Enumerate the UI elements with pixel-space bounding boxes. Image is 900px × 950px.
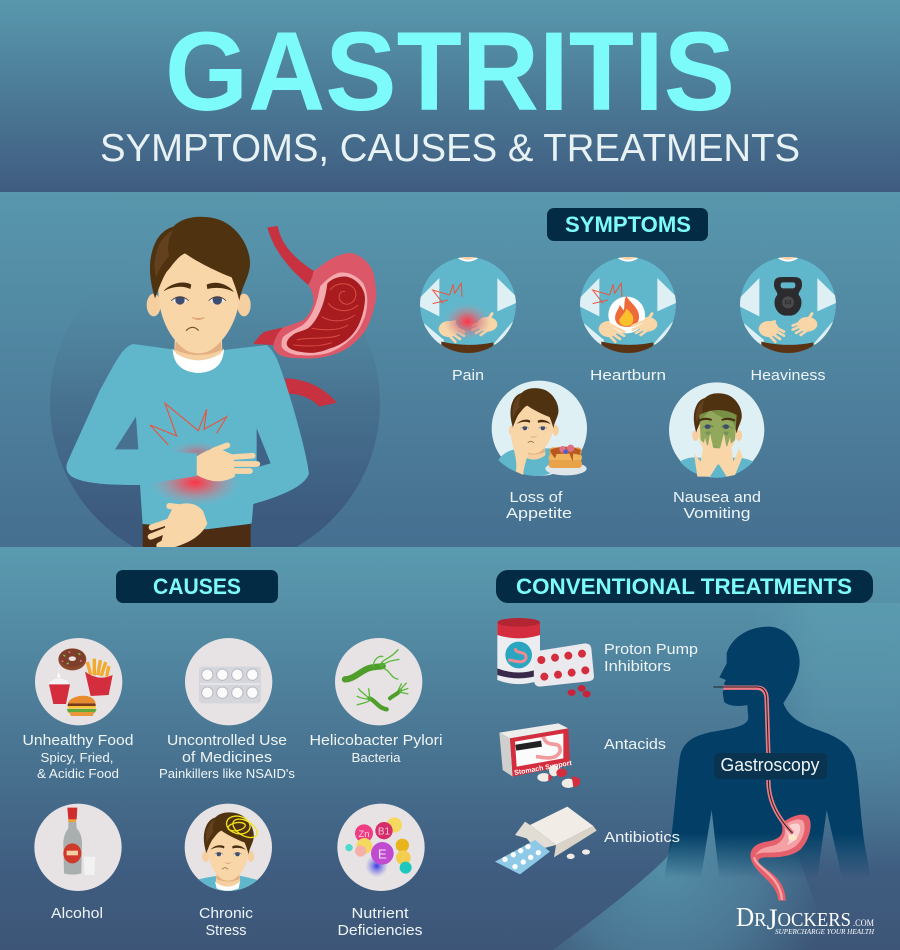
symptom: pain: Pain [452, 367, 484, 384]
cause: unhealthy food: Unhealthy Food [22, 732, 134, 749]
light wedge at bottom [553, 800, 830, 950]
symptom: nausea and vomiting: Nausea and [673, 489, 761, 506]
plate of pancakes [545, 445, 587, 475]
cause: unhealthy food [22, 638, 134, 781]
logo: DrJockers.com: J [767, 903, 778, 936]
symptom: pain [420, 257, 516, 384]
head [147, 217, 251, 366]
cause: helicobacter pylori [310, 638, 442, 765]
treatment: antibiotics [495, 807, 680, 874]
cause: chronic stress: Chronic [199, 905, 254, 922]
panel: symptoms icons [420, 257, 836, 522]
title: GASTRITIS [165, 9, 735, 134]
symptom: loss of appetite: Appetite [506, 505, 572, 522]
panel: causes [22, 638, 442, 939]
cause: nutrient deficiencies: Zn [359, 829, 369, 839]
cause: nutrient deficiencies: B1 [378, 827, 391, 838]
symptom: heaviness: 64 [785, 300, 792, 306]
symptom: heaviness [740, 257, 836, 384]
treatment: antacids [499, 723, 666, 788]
cause: nutrient deficiencies: Deficiencies [338, 922, 422, 939]
cause: chronic stress [185, 804, 272, 939]
cause: alcohol [34, 804, 122, 922]
treatment: proton pump inhibitors [497, 618, 698, 697]
subtitle: SYMPTOMS, CAUSES & TREATMENTS [100, 127, 800, 170]
icon: inflamed stomach [253, 226, 376, 407]
logo: DrJockers.com: OCKERS [777, 909, 851, 931]
lower hand [151, 503, 207, 547]
pain glow [154, 467, 236, 504]
treatment: proton pump inhibitors: Proton Pump [604, 641, 698, 658]
arm gaps [115, 417, 138, 449]
upper hand [140, 445, 257, 485]
cause: uncontrolled use of medicines: Painkillers like NSAID's [159, 767, 295, 781]
treatment: proton pump inhibitors: Inhibitors [604, 658, 671, 675]
symptom: heartburn [580, 257, 676, 384]
treatment: antacids: Stomach Support [514, 760, 573, 777]
panel: treatments list [495, 618, 698, 874]
cause: unhealthy food: Spicy, Fried, [40, 751, 114, 765]
trousers [143, 524, 251, 547]
collar [173, 349, 224, 373]
symptom: heaviness: Heaviness [750, 367, 826, 384]
heading: symptoms: SYMPTOMS [565, 212, 691, 237]
heading: causes: CAUSES [153, 574, 241, 599]
cause: uncontrolled use of medicines: of Medicines [182, 749, 272, 766]
pain spark [150, 403, 227, 445]
heading: causes [116, 570, 278, 603]
backdrop circle [50, 369, 380, 547]
illustration: man with stomach pain [50, 217, 380, 568]
logo: DrJockers.com [736, 902, 875, 936]
gastroscopy label: Gastroscopy [720, 755, 820, 775]
cause: nutrient deficiencies: E [378, 847, 387, 862]
panel: causes and treatments background [0, 547, 900, 950]
symptom: heartburn: Heartburn [590, 367, 666, 384]
cause: helicobacter pylori: Helicobacter Pylori [310, 732, 442, 749]
treatment: antacids: Antacids [604, 736, 666, 753]
symptom: loss of appetite: Loss of [510, 489, 563, 506]
body silhouette [663, 627, 872, 901]
heading: symptoms [547, 208, 708, 241]
heading: conventional treatments: CONVENTIONAL TREATMENTS [516, 574, 852, 599]
cause: chronic stress: Stress [206, 922, 246, 939]
gastroscopy label [714, 753, 827, 779]
symptom: nausea and vomiting [669, 382, 764, 522]
cause: nutrient deficiencies: Nutrient [352, 905, 409, 922]
logo: DrJockers.com: SUPERCHARGE YOUR HEALTH [775, 927, 875, 936]
cause: helicobacter pylori: Bacteria [352, 751, 401, 765]
cause: nutrient deficiencies [337, 804, 425, 939]
panel: symptoms background [0, 192, 900, 547]
silhouette with gastroscopy [663, 627, 872, 901]
logo: DrJockers.com: DR [736, 902, 768, 932]
treatment: antibiotics: Antibiotics [604, 829, 680, 846]
cause: unhealthy food: & Acidic Food [37, 767, 119, 781]
esophagus and stomach [713, 687, 811, 901]
cause: uncontrolled use of medicines [159, 638, 295, 781]
cause: uncontrolled use of medicines: Uncontrolled Use [167, 732, 287, 749]
symptom: loss of appetite [492, 381, 587, 522]
light area behind silhouette [787, 603, 900, 832]
heading: conventional treatments [496, 570, 873, 603]
logo: DrJockers.com: .COM [853, 918, 874, 928]
sweater [66, 344, 309, 529]
symptom: nausea and vomiting: Vomiting [684, 505, 750, 522]
cause: alcohol: Alcohol [51, 905, 103, 922]
panel: header background [0, 0, 900, 192]
